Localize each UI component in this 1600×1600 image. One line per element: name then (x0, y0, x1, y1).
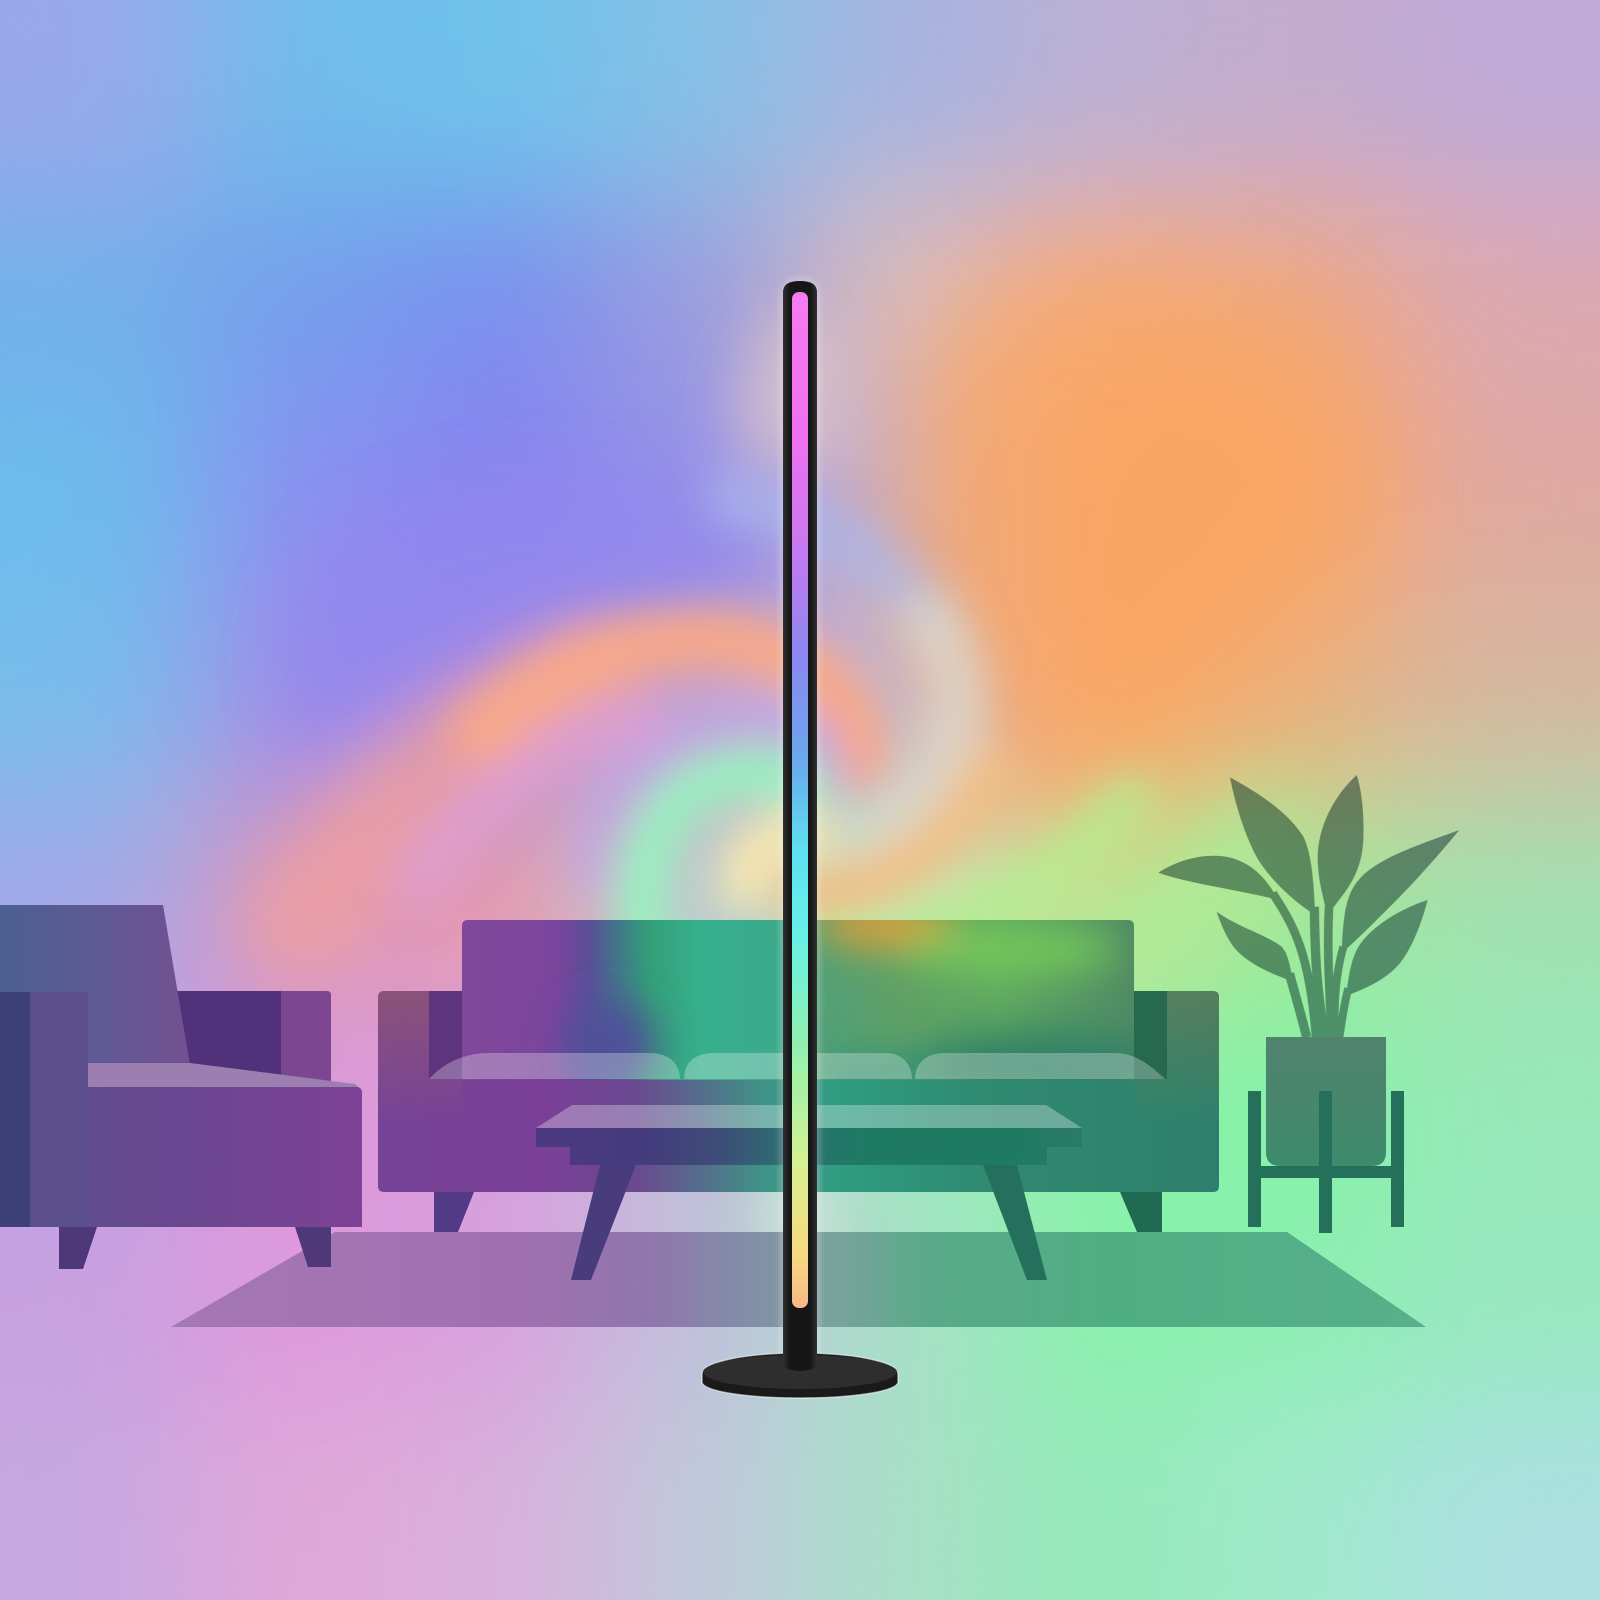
swirl: cream core (745, 835, 810, 885)
sofa legs (434, 1192, 474, 1232)
coffee table (536, 1105, 1082, 1280)
swirl: orange arc (480, 640, 860, 760)
plant (1158, 775, 1459, 1233)
table legs (571, 1165, 636, 1280)
sofa inner arm shadows (429, 991, 1167, 1079)
glow: violet field (286, 474, 778, 750)
lamp glow (779, 277, 821, 1377)
background: central swirl (420, 500, 1130, 1240)
lamp light strip (792, 292, 808, 1308)
swirl: periwinkle outer band (730, 500, 930, 620)
pot (1266, 1037, 1386, 1166)
table top (536, 1105, 1082, 1128)
lamp base (702, 1353, 898, 1398)
floor lamp (702, 277, 898, 1398)
sofa back (462, 920, 1134, 1080)
swirl: purple inner arc (590, 718, 830, 880)
armchair body (88, 1087, 362, 1227)
armchair far arm (170, 991, 331, 1086)
rug (171, 1232, 1426, 1327)
armchair back (0, 905, 190, 1065)
background: orange glow (900, 271, 1376, 840)
swirl: arc tail (300, 680, 590, 920)
swirl: mint inner curl (642, 773, 800, 990)
plant foliage (1158, 775, 1459, 1037)
swirl: light spine at lamp foot (755, 1190, 845, 1240)
swirl: yellow-green arm (820, 800, 1130, 950)
swirl: pink arc (420, 720, 640, 880)
armchair legs (59, 1227, 331, 1269)
glow: yellow-green field (1000, 780, 1300, 1010)
armchair seat cushion (88, 1063, 362, 1090)
sofa arms and seat base (378, 991, 1219, 1192)
lamp pole (783, 281, 817, 1371)
armchair (0, 905, 362, 1269)
sofa (378, 903, 1219, 1232)
armchair near arm (0, 992, 88, 1227)
sofa cushions (429, 1053, 1165, 1079)
swirl: peach arm (800, 770, 990, 895)
background: soft shapes (286, 320, 1300, 1010)
plant stand (1248, 1091, 1404, 1233)
glow: pale column above swirl (740, 320, 844, 475)
table front rail (536, 1128, 1082, 1165)
